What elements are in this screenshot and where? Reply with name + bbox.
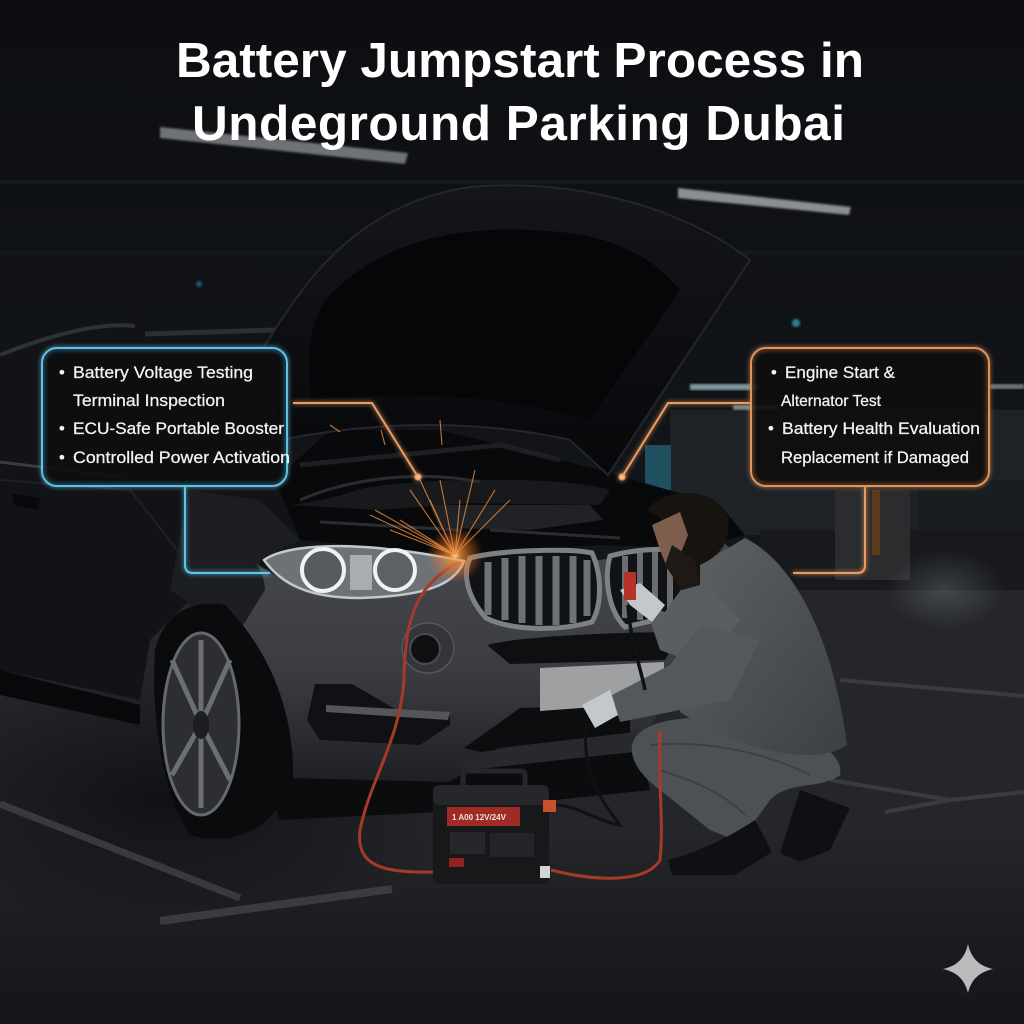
callout: right checks bbox=[751, 348, 989, 486]
callout: left checks: • bbox=[59, 420, 65, 438]
callout: left checks bbox=[42, 348, 290, 486]
mechanic: upper arm bbox=[645, 570, 740, 665]
callout: left checks: Terminal Inspection bbox=[73, 392, 225, 410]
car: fog lamp bbox=[402, 623, 454, 673]
callout: right checks: Alternator Test bbox=[781, 393, 882, 410]
car: underbody shadow bbox=[260, 745, 650, 820]
icon: sparkle bbox=[943, 944, 993, 993]
connector: left callout to headlight bbox=[185, 487, 270, 573]
callout: left checks: Controlled Power Activation bbox=[73, 449, 290, 467]
sparks bbox=[330, 420, 510, 583]
car: lower mesh bbox=[464, 706, 630, 752]
car: fender lower bbox=[170, 510, 265, 630]
car: open hood bbox=[262, 185, 750, 475]
jumper cables bbox=[360, 562, 661, 878]
mechanic: gloves bbox=[620, 583, 665, 622]
connector: left callout to engine bbox=[293, 403, 420, 480]
title: Battery Jumpstart Process in bbox=[176, 33, 864, 88]
car: licence plate bbox=[540, 662, 664, 711]
car: left air intake bbox=[307, 684, 450, 745]
callout: right checks: Engine Start & bbox=[785, 364, 895, 382]
connector: right callout to engine bbox=[620, 403, 750, 480]
ceiling lights bbox=[160, 127, 1024, 410]
mechanic: shoes bbox=[668, 820, 772, 875]
car: wheel bbox=[154, 604, 293, 839]
title: Undeground Parking Dubai bbox=[192, 96, 845, 151]
booster: red label: 1 A00 12V/24V bbox=[452, 813, 507, 822]
car: door handle bbox=[12, 494, 40, 510]
portable booster bbox=[433, 771, 556, 884]
callout: left checks: Battery Voltage Testing bbox=[73, 364, 253, 382]
mechanic bbox=[582, 493, 850, 875]
car: engine bay bbox=[275, 430, 745, 555]
car: front body bbox=[236, 540, 745, 782]
callout: left checks: • bbox=[59, 364, 65, 382]
callout: left checks: ECU-Safe Portable Booster bbox=[73, 420, 285, 438]
callout: right checks: • bbox=[768, 420, 774, 438]
mechanic: lower arm bbox=[612, 625, 760, 722]
callout: left checks: • bbox=[59, 449, 65, 467]
car bbox=[0, 185, 750, 839]
mechanic: torso bbox=[680, 538, 847, 755]
car: side body bbox=[0, 320, 300, 700]
car: grille right bbox=[607, 549, 690, 627]
mechanic: head bbox=[648, 493, 728, 590]
car: splitter bbox=[460, 732, 635, 770]
callout: right checks: • bbox=[771, 364, 777, 382]
connector: right callout to mechanic bbox=[793, 487, 865, 573]
car: fender bbox=[170, 490, 300, 640]
car: grille left bbox=[467, 550, 600, 628]
car: headlight bbox=[264, 546, 464, 598]
callout: right checks: Replacement if Damaged bbox=[781, 449, 969, 467]
callout: right checks: Battery Health Evaluation bbox=[782, 420, 980, 438]
title bbox=[176, 33, 864, 151]
mechanic: legs bbox=[632, 718, 840, 842]
car: lower grille slot bbox=[487, 632, 680, 664]
